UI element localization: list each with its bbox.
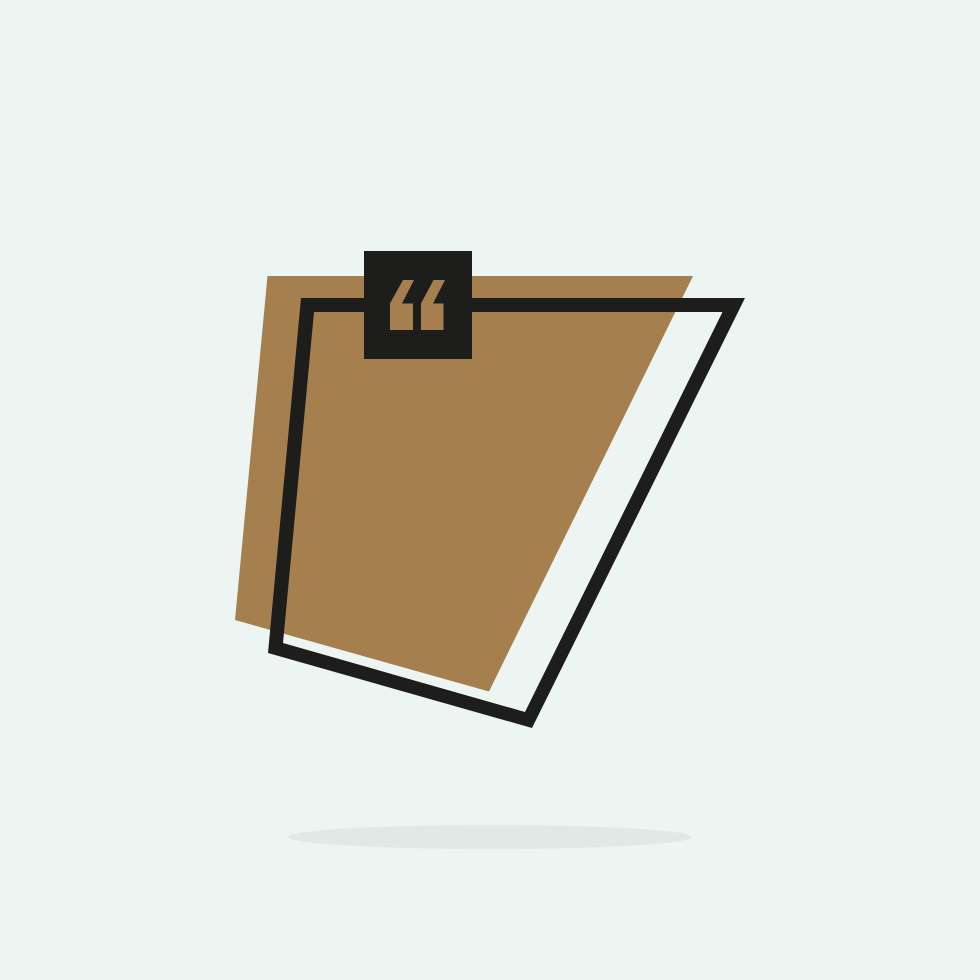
outline frame — [268, 298, 745, 728]
ground shadow — [288, 825, 692, 849]
icon: quotation marks — [390, 280, 445, 330]
badge square — [364, 251, 472, 359]
panel: brown trapezoid — [235, 276, 693, 692]
quote badge — [364, 251, 472, 359]
